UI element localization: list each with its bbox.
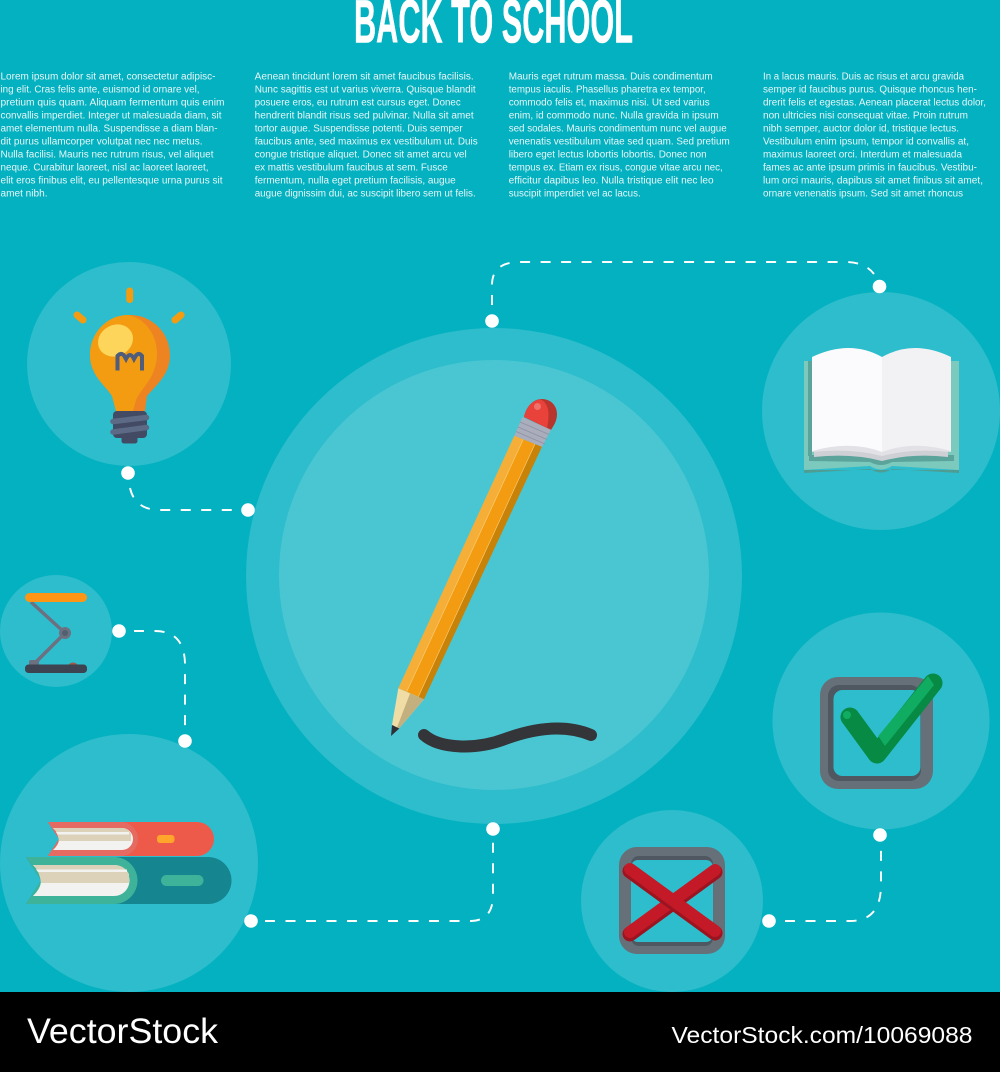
text block: column 1: convallis imperdiet. Integer ut malesuada diam, sit [0,110,222,122]
icon: teal book [26,857,232,904]
text block: column 1: pretium quis quam. Aliquam fermentum quis enim [0,98,224,109]
footer band [0,992,1000,1072]
drawn squiggle line [424,728,591,746]
text block: column 2: tortor augue. Suspendisse potenti. Duis semper [255,124,463,134]
circle: check mark [772,612,990,830]
text block: column 3: Mauris eget rutrum massa. Duis condimentum [509,72,713,83]
icon: light bulb [77,291,181,444]
text block: column 4: nibh semper, auctor dolor id, tristique lectus. [763,124,959,134]
text block: column 4: non ultricies nisi consequat vitae. Proin rutrum [763,110,968,122]
text block: column 2: ex mattis vestibulum faucibus at sem. Fusce [255,162,448,173]
text block: column 3: efficitur dapibus leo. Nulla tristique elit nec leo [509,175,714,186]
text block: column 3: tempus ex. Etiam ex risus, congue vitae arcu nec, [509,162,723,173]
text block: column 3: sed sodales. Mauris condimentum nunc vel augue [509,124,727,134]
text block: column 1: dit purus ullamcorper volutpat nec nec metus. [0,136,202,148]
central circle with pencil [246,328,742,824]
text block: column 1: neque. Curabitur laoreet, nisl ac laoreet laoreet, [0,162,208,173]
text block: column 3: suscipit imperdiet vel ac lacus. [509,188,641,199]
text block: column 4: fames ac ante ipsum primis in faucibus. Vestibu- [763,162,977,173]
text block: column 1: ing elit. Cras felis ante, euismod id ornare vel, [0,85,200,96]
circle: open book [762,292,1000,530]
text block: column 1: Lorem ipsum dolor sit amet, consectetur adipisc- [0,72,216,83]
pencil eraser [524,399,557,430]
text block: column 4 [763,72,986,199]
text block: column 2: congue tristique aliquet. Donec sit amet arcu vel [255,149,467,160]
text block: column 1: Nulla facilisi. Mauris nec rutrum risus, vel aliquet [0,149,214,160]
circle: stacked books [0,734,258,992]
text block: column 1: amet nibh. [0,188,47,199]
footer url text: VectorStock.com/10069088 [672,1022,972,1048]
dashed connector lines [130,262,881,921]
text block: column 1 [0,72,224,199]
text block: column 4: ornare venenatis ipsum. Sed sit amet rhoncus [763,188,963,199]
text block: column 3: tempus iaculis. Phasellus pharetra ex tempor, [509,85,706,96]
text block: column 2: Aenean tincidunt lorem sit amet faucibus facilisis. [255,72,474,83]
text block: column 3: libero eget lectus lobortis lobortis. Donec non [509,149,707,160]
text block: column 3: commodo felis et, maximus nisi. Ut sed varius [509,98,710,109]
text block: column 2: Nunc sagittis est ut varius viverra. Quisque blandit [255,85,476,96]
circle: desk lamp [0,575,112,687]
icon: open book [804,348,959,473]
icon: red book [48,822,214,856]
text block: column 2: augue dignissim dui, ac suscipit libero sem ut felis. [255,188,476,199]
footer logo text: VectorStock [27,1012,219,1051]
text block: column 3: venenatis vestibulum vitae sed quam. Sed pretium [509,136,730,148]
text block: column 2: hendrerit blandit risus sed pulvinar. Nulla sit amet [255,110,474,122]
pencil ferrule [514,417,551,447]
text block: column 2: fermentum, nulla eget pretium facilisis, augue [255,175,456,186]
text block: column 2: posuere eros, eu rutrum est cursus eget. Donec [255,98,461,109]
pencil [391,399,557,736]
text block: column 3: enim, id commodo nunc. Nulla gravida in ipsum [509,110,719,122]
text block: column 4: semper id faucibus purus. Quisque rhoncus hen- [763,85,977,96]
icon: checkbox with cross mark [619,847,725,954]
circle: light bulb [27,262,231,466]
text block: column 1: amet elementum nulla. Suspendisse a diam blan- [0,124,218,134]
text block: column 3 [509,72,730,199]
text block: column 4: maximus laoreet orci. Interdum et malesuada [763,149,962,160]
text block: column 2 [255,72,478,199]
icon: checkbox with check mark [820,676,934,789]
text block: column 1: elit eros finibus elit, eu pellentesque urna purus sit [0,175,223,186]
text block: column 4: drerit felis et egestas. Aenean placerat lectus dolor, [763,98,986,109]
icon: desk lamp [25,593,87,673]
text block: column 4: Vestibulum enim ipsum, tempor id convallis at, [763,136,969,148]
connector dots [112,280,887,928]
text block: column 4: In a lacus mauris. Duis ac risus et arcu gravida [763,72,964,83]
text block: column 2: faucibus ante, sed maximus ex vestibulum ut. Duis [255,136,478,148]
text block: column 4: lum orci mauris, dapibus sit amet finibus sit amet, [763,175,983,186]
circle: cross mark [581,810,763,992]
